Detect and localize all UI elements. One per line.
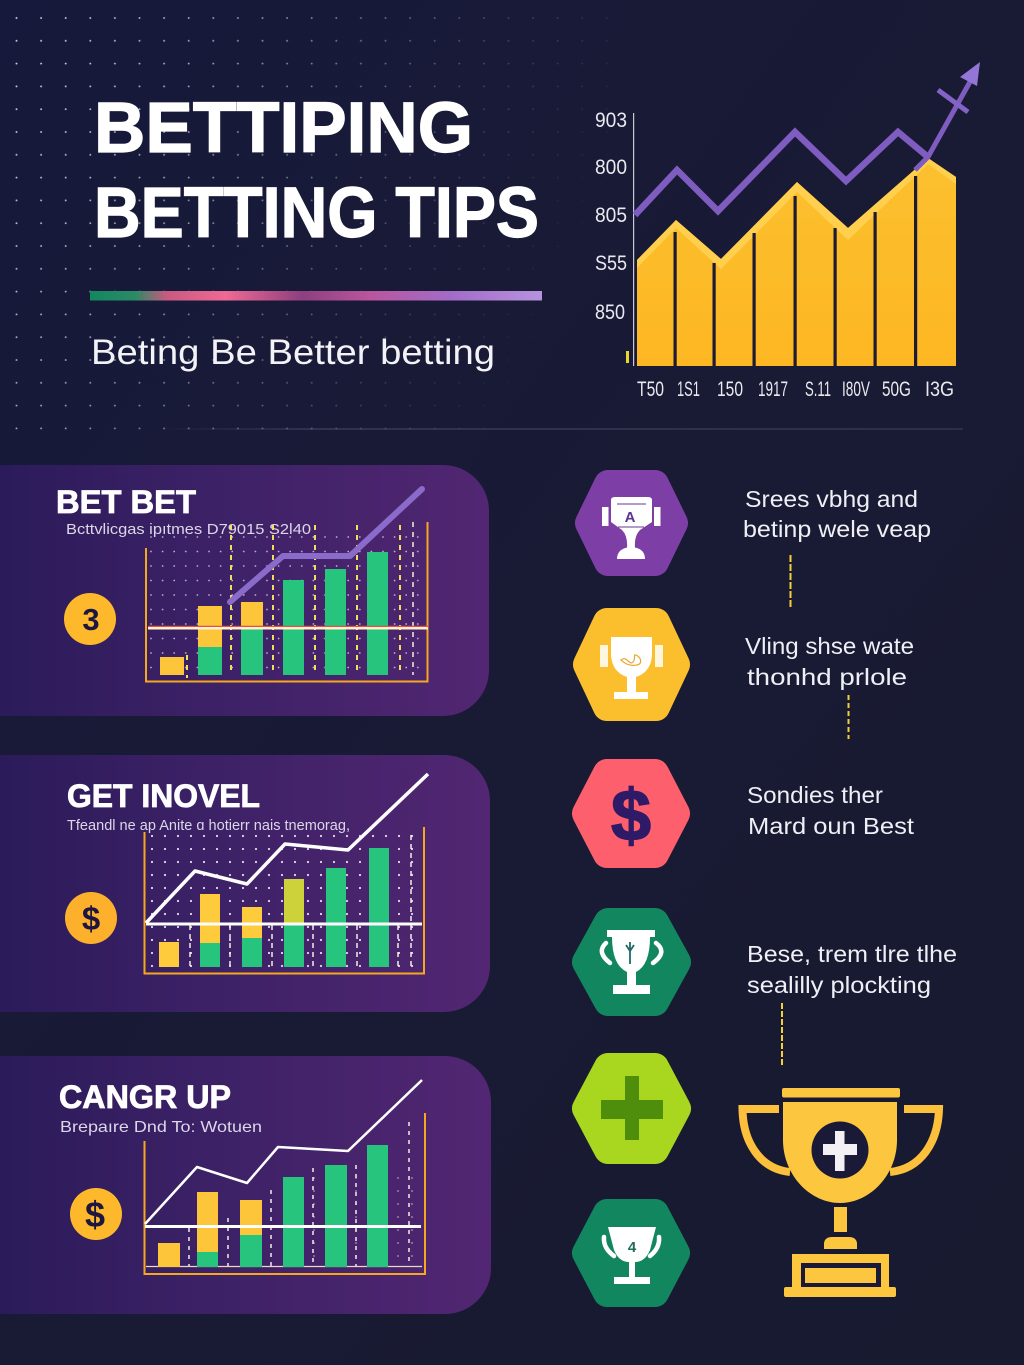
chart x axis labels: S.11 xyxy=(805,378,831,401)
chart x axis labels: 1917 xyxy=(758,378,788,401)
chart y axis: 903 xyxy=(595,109,627,132)
gradient rule xyxy=(90,291,542,300)
header title: BETTIPING xyxy=(94,89,473,168)
icon: green small trophy hexagon: 4 xyxy=(628,1239,637,1256)
icon: yellow trophy hexagon xyxy=(587,622,676,707)
dollar badge xyxy=(65,892,117,944)
dollar badge: $ xyxy=(85,1194,105,1235)
text block: tip one xyxy=(743,486,931,542)
chart x axis labels: 50G xyxy=(882,378,911,401)
bar chart with trend xyxy=(146,489,428,682)
text block: tip two xyxy=(745,633,914,690)
header area chart xyxy=(595,62,980,401)
number badge xyxy=(64,593,116,645)
panel heading: CANGR UP xyxy=(59,1079,231,1115)
chart y axis xyxy=(595,109,634,366)
dollar badge: $ xyxy=(82,900,100,937)
text block: tip two: thonhd prlole xyxy=(747,664,907,690)
text block: tip two: Vling shse wate xyxy=(745,633,914,659)
panel: bet bet xyxy=(0,465,489,716)
header title: BETTING TIPS xyxy=(94,174,539,253)
icon: large gold trophy xyxy=(742,1088,939,1297)
text block: tip one: betinp wele veap xyxy=(743,516,931,542)
bar chart with trend xyxy=(144,1080,425,1274)
purple trend arrow xyxy=(635,62,980,215)
icon: green small trophy hexagon xyxy=(586,1213,676,1293)
chart y axis: 850 xyxy=(595,301,625,324)
panel description: Bcttvlicgas ipıtmes D79015 S2l40 xyxy=(66,521,311,538)
chart y axis: 800 xyxy=(595,156,627,179)
text block: tip three xyxy=(747,782,915,839)
chart y axis: 805 xyxy=(595,204,627,227)
panel heading: BET BET xyxy=(56,484,196,520)
icon: green trophy hexagon xyxy=(586,922,677,1002)
text block: tip one: Srees vbhg and xyxy=(745,486,918,512)
panel: get inovel xyxy=(0,755,490,1012)
text block: tip four xyxy=(747,941,957,998)
icon: purple trophy hexagon: A xyxy=(625,509,636,526)
chart x axis labels xyxy=(637,378,954,401)
chart x axis labels: T50 xyxy=(637,378,664,401)
number badge: 3 xyxy=(82,602,100,637)
panel heading: GET INOVEL xyxy=(67,778,260,814)
chart x axis labels: 150 xyxy=(717,378,743,401)
text block: tip three: Sondies ther xyxy=(747,782,883,808)
bar chart with trend xyxy=(144,774,428,974)
panel description: Tfeandl ne ap Anite ɑ hotierr nais tnemorag, xyxy=(67,817,350,834)
chart x axis labels: 1S1 xyxy=(677,378,700,401)
chart x axis labels: I80V xyxy=(842,378,870,401)
dollar badge xyxy=(70,1188,122,1240)
text block: tip four: sealilly plockting xyxy=(747,972,931,998)
text block: tip three: Mard oun Best xyxy=(748,813,915,839)
chart x axis labels: I3G xyxy=(925,378,954,401)
amber area xyxy=(637,158,956,366)
header title xyxy=(94,89,539,253)
subtitle: Beting Be Better betting xyxy=(91,333,495,372)
icon: red dollar hexagon xyxy=(586,773,676,856)
chart y axis: S55 xyxy=(595,252,627,275)
text block: tip four: Bese, trem tlre tlhe xyxy=(747,941,957,967)
icon: lime plus hexagon xyxy=(586,1067,677,1150)
icon: purple trophy hexagon xyxy=(589,484,674,562)
panel description: Brepaıre Dnd To: Wotuen xyxy=(60,1119,262,1136)
icon: red dollar hexagon: $ xyxy=(611,776,651,856)
panel: cangr up xyxy=(0,1056,491,1314)
